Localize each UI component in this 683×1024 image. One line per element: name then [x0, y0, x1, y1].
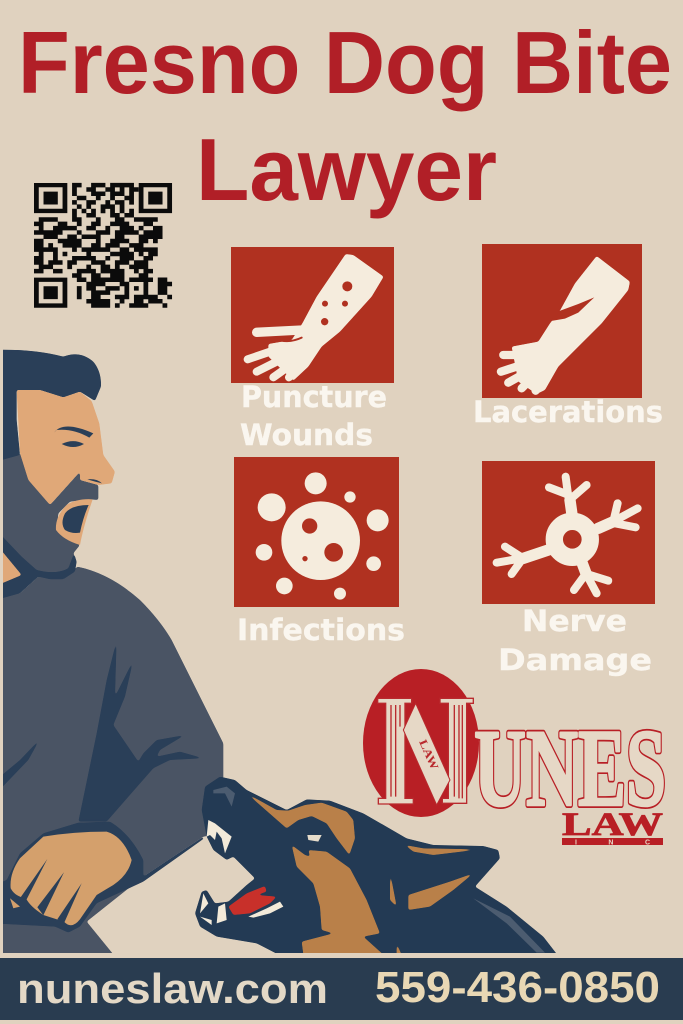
panel: puncture wounds: [231, 247, 394, 452]
sweater folds: [0, 640, 203, 822]
logo red circle: [363, 669, 479, 817]
icon background: [234, 457, 399, 607]
logo letter N with law book: [378, 698, 473, 805]
panel: nerve damage: [482, 461, 655, 677]
eyebrow and eye: [54, 426, 93, 447]
title: Fresno Dog Bite: [18, 13, 672, 112]
logo: Nunes Law: [363, 669, 666, 846]
sleeve cuff: [0, 822, 204, 933]
icon background: [482, 244, 642, 398]
phone number: 559-436-0850: [375, 963, 660, 1012]
icon: arm with laceration: [501, 256, 630, 394]
dog body: [195, 777, 556, 953]
logo letter N with law book: LAW: [416, 738, 440, 773]
hair: [0, 350, 101, 463]
footer band: [0, 958, 683, 1020]
panel: infections: [234, 457, 405, 647]
website: nuneslaw.com: [17, 965, 328, 1012]
mouth: [56, 499, 93, 545]
QR code: [34, 183, 172, 308]
hand: [10, 832, 132, 925]
label: Nerve Damage: [498, 604, 652, 677]
logo INC bar: [562, 838, 663, 846]
nostril: [87, 479, 102, 483]
dog teeth: [200, 820, 283, 925]
panel: lacerations: [473, 244, 663, 429]
collar: [3, 537, 76, 598]
dog tan markings: [252, 796, 470, 953]
illustration: shouting man: [0, 350, 223, 967]
label: Nerve Damage: Damage: [498, 643, 652, 677]
sweater: [0, 567, 223, 967]
label: Infections: Infections: [237, 613, 405, 647]
icon: infection cells: [256, 472, 389, 600]
title: [18, 13, 672, 219]
dog tongue: [228, 886, 277, 915]
label: Lacerations: Lacerations: [473, 395, 663, 429]
icon: nerve cell: [497, 477, 638, 593]
dog back highlight: [473, 898, 545, 953]
beard: [0, 453, 98, 580]
label: Nerve Damage: Nerve: [522, 604, 627, 638]
label: Puncture Wounds: Wounds: [240, 418, 373, 452]
dog nose highlight: [213, 787, 235, 807]
label: Puncture Wounds: [240, 380, 387, 452]
logo wordmark LAW: LAW: [562, 807, 663, 843]
icon: arm with puncture wounds: [248, 254, 384, 381]
face: [17, 390, 115, 505]
logo INC bar: I N C: [575, 840, 650, 846]
dog eye: [307, 835, 322, 842]
label: Puncture Wounds: Puncture: [241, 380, 387, 414]
title: Lawyer: [196, 120, 497, 219]
icon background: [482, 461, 655, 604]
illustration: snarling dog: [195, 777, 556, 953]
icon background: [231, 247, 394, 383]
neck: [3, 552, 21, 583]
